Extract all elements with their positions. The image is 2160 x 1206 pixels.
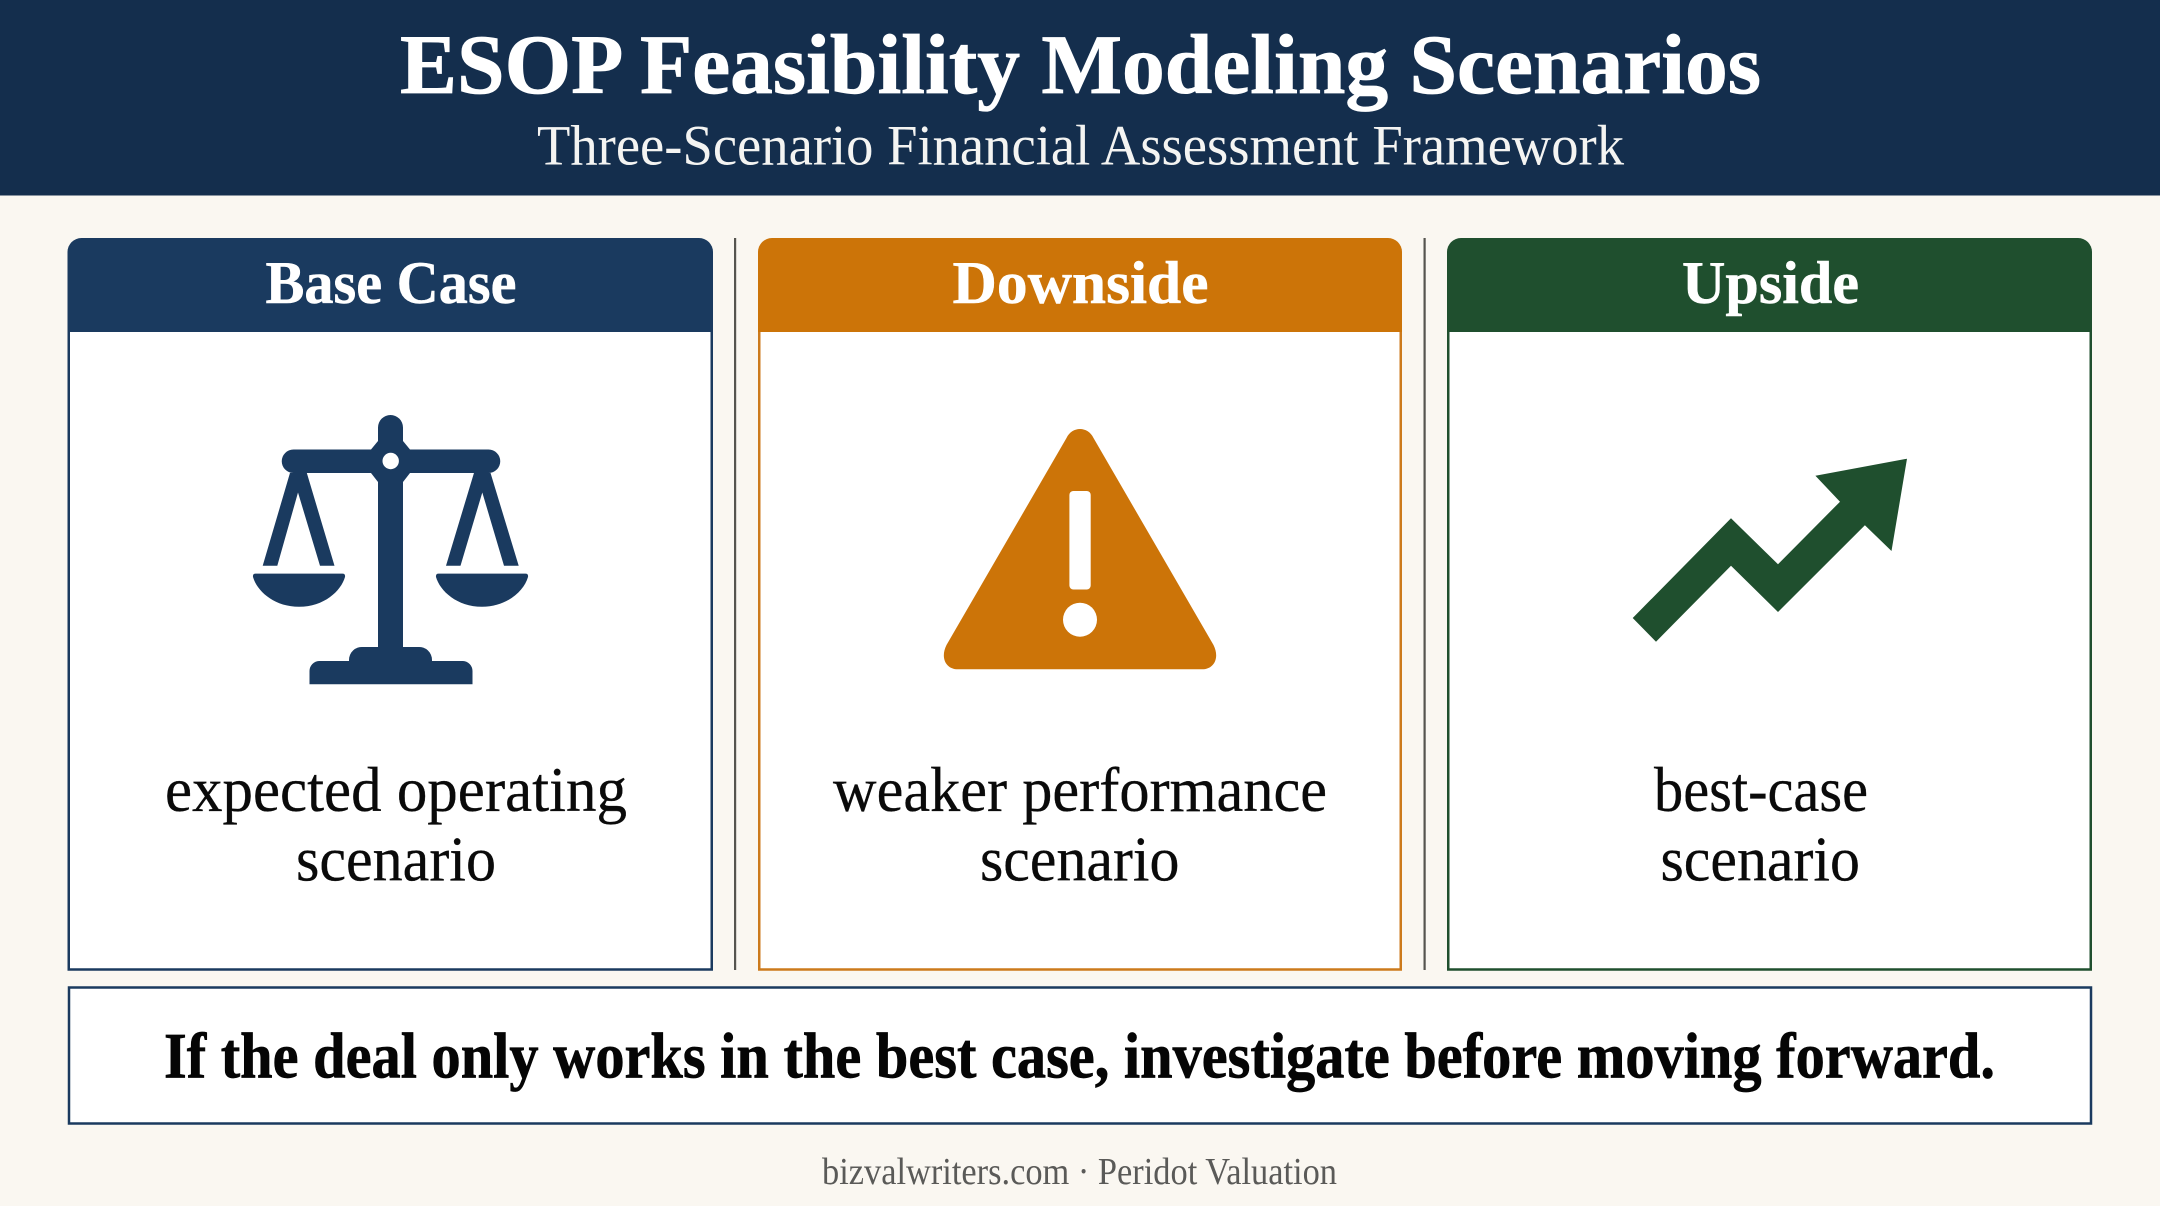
icon: rising arrow	[1633, 459, 1907, 642]
icon: balance scales	[253, 415, 528, 684]
upside description	[1654, 754, 1868, 894]
base case header	[68, 238, 713, 332]
divider left	[734, 238, 736, 970]
icon: warning triangle	[944, 429, 1216, 669]
upside description: best-case	[1654, 754, 1868, 825]
downside description: weaker performance	[833, 754, 1327, 825]
downside description: scenario	[980, 824, 1180, 894]
downside heading: Downside	[952, 250, 1208, 316]
upside description: scenario	[1660, 824, 1860, 894]
base case description: scenario	[296, 824, 496, 894]
callout banner	[69, 988, 2091, 1124]
base case description	[165, 754, 627, 894]
base case heading: Base Case	[266, 250, 516, 316]
footer credit: bizvalwriters.com · Peridot Valuation	[822, 1151, 1337, 1193]
base case description: expected operating	[165, 754, 627, 825]
downside description	[833, 754, 1327, 894]
callout text: If the deal only works in the best case, investigate before moving forward.	[164, 1020, 1995, 1092]
divider right	[1424, 238, 1426, 970]
header band	[0, 0, 2160, 196]
upside heading: Upside	[1682, 250, 1859, 316]
panel: downside	[758, 238, 1402, 970]
subtitle: Three-Scenario Financial Assessment Framework	[537, 114, 1624, 178]
title: ESOP Feasibility Modeling Scenarios	[400, 18, 1761, 112]
downside header	[758, 238, 1402, 332]
panel: base case	[68, 238, 713, 970]
upside header	[1447, 238, 2092, 332]
panel: upside	[1447, 238, 2092, 970]
